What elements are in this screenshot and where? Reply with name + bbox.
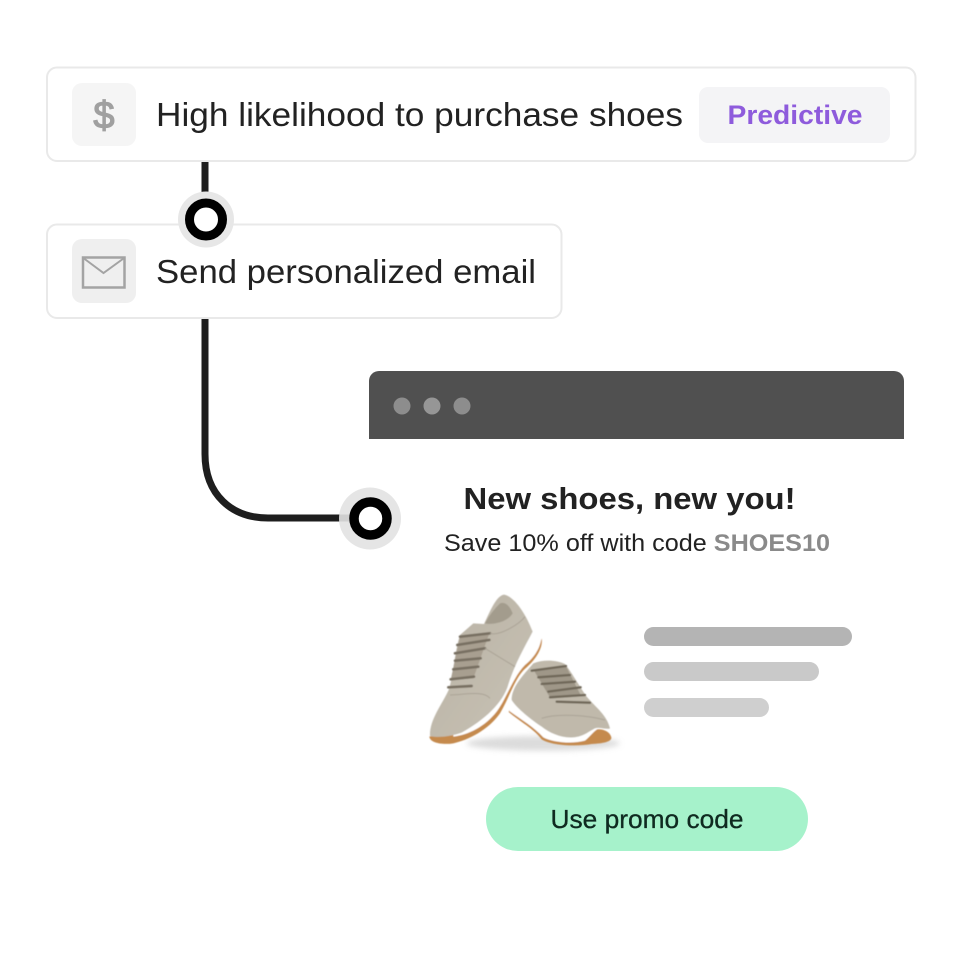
icon: envelope [72,239,136,303]
connector: trigger to action [202,162,208,215]
panel: email preview [369,371,904,851]
email subhead: Save 10% off with code SHOES10 [444,530,830,557]
front shoe [429,638,542,744]
icon: dollar sign [72,83,136,146]
email headline: New shoes, new you! [464,481,796,516]
button: use promo code: Use promo code [550,804,744,834]
button: use promo code [486,787,808,851]
connector: action to email [205,319,352,518]
heading: trigger label: High likelihood to purchase shoes [156,96,683,133]
panel: trigger card [47,68,916,161]
node: second connector dot [339,488,401,550]
icon: dollar sign: $ [93,95,115,137]
rear shoe [509,708,611,745]
heading: action label: Send personalized email [156,253,536,290]
image: pair of shoes [429,595,620,751]
node: first connector dot [178,192,234,248]
browser title bar [369,371,904,439]
panel: action card [47,224,562,318]
placeholder text lines [644,627,852,717]
badge: predictive: Predictive [728,100,862,130]
badge: predictive [699,87,890,143]
